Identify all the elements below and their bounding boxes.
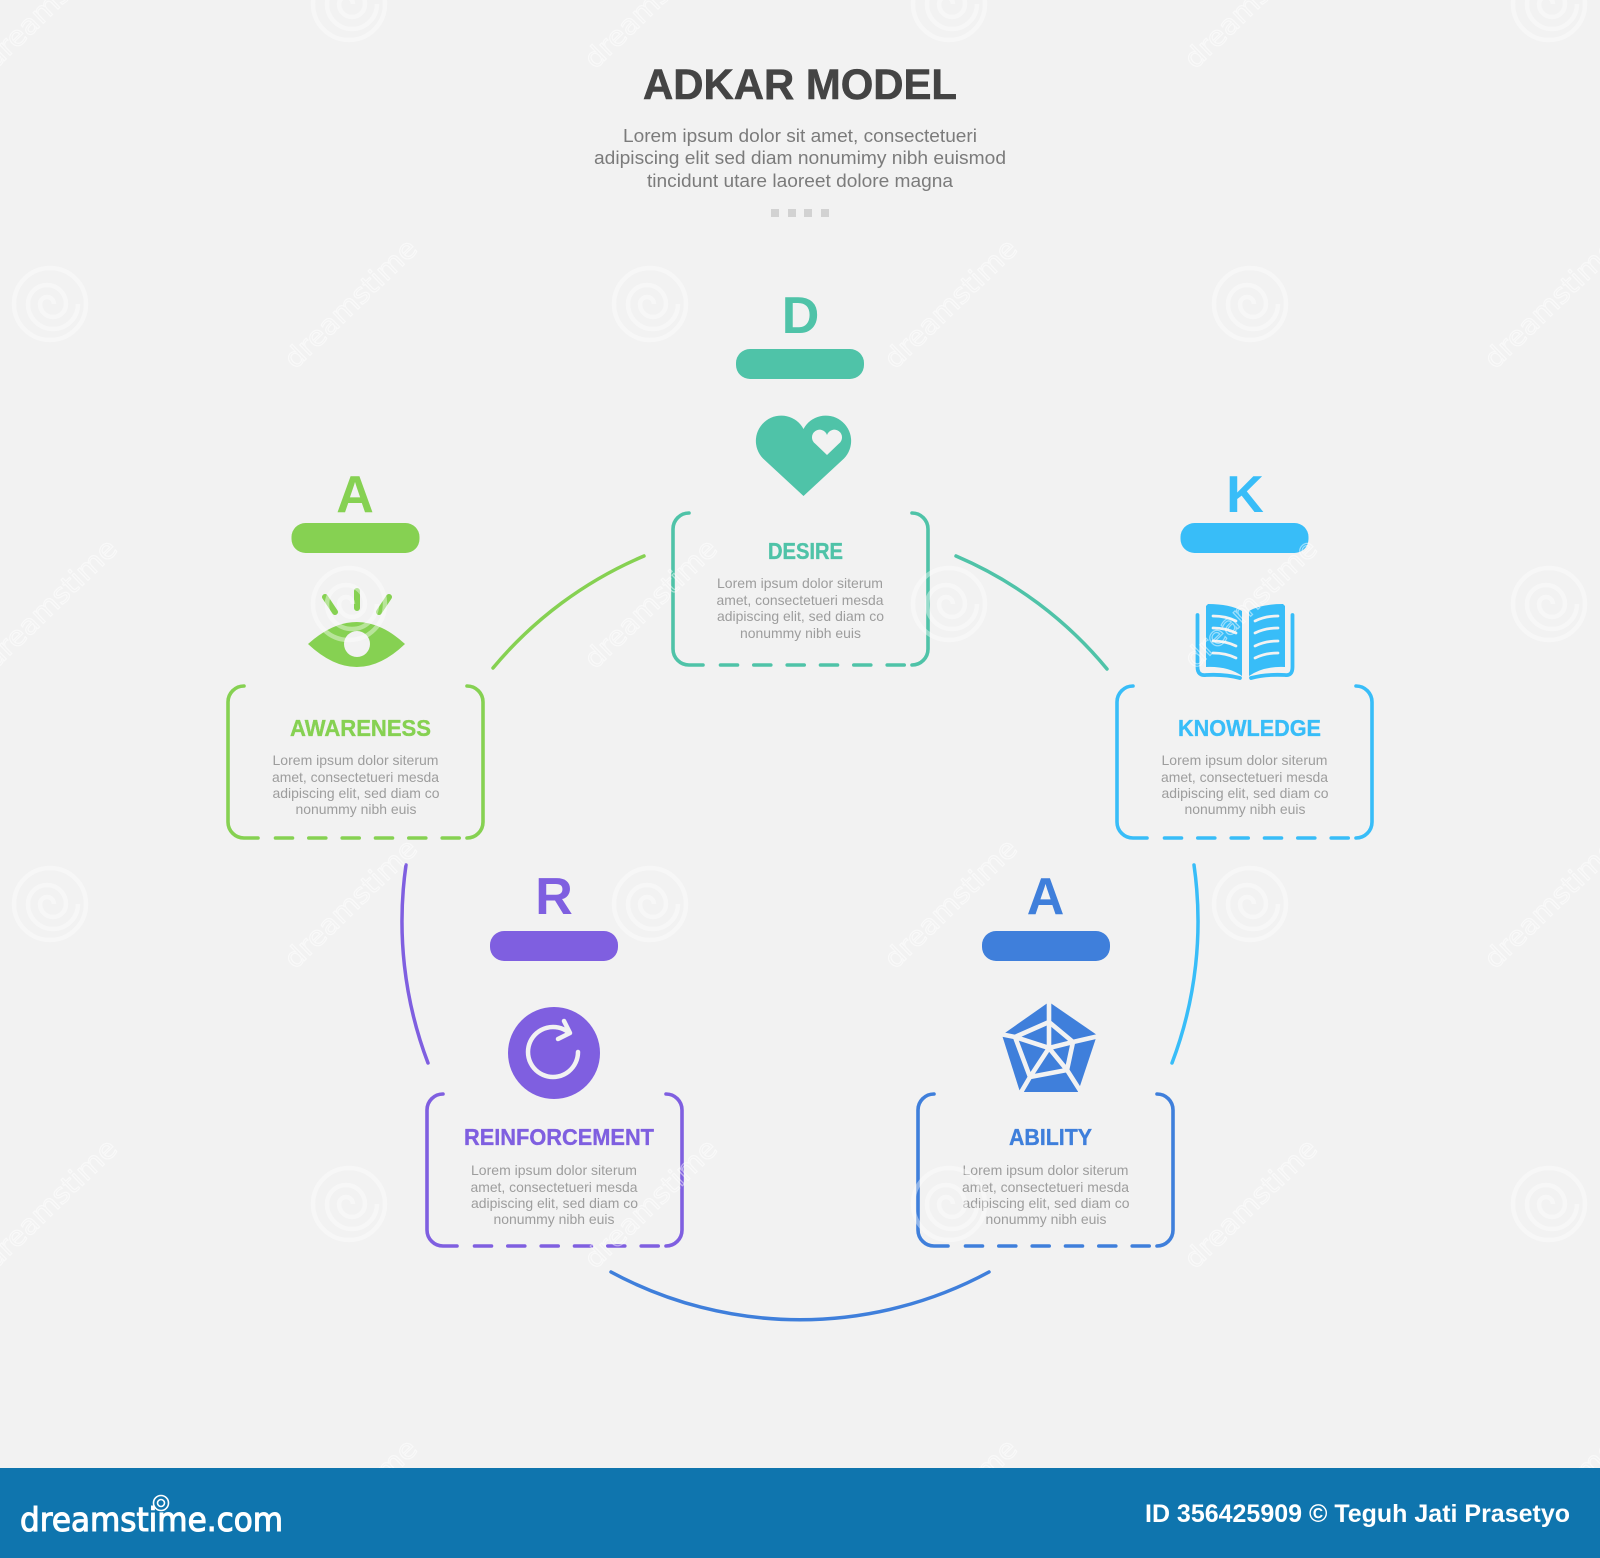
body text: amet, consectetueri mesda xyxy=(1161,769,1328,785)
bar xyxy=(736,349,864,379)
body text: nonummy nibh euis xyxy=(1184,801,1306,817)
icon: eye xyxy=(308,591,405,667)
body text: amet, consectetueri mesda xyxy=(716,592,884,608)
body text: amet, consectetueri mesda xyxy=(470,1179,638,1195)
body text xyxy=(962,1162,1130,1227)
letter R: R xyxy=(535,868,573,926)
letter A: A xyxy=(1027,868,1064,926)
heading: AWARENESS xyxy=(290,715,431,741)
cycle arcs xyxy=(402,556,1198,1320)
box xyxy=(673,513,928,665)
body text: amet, consectetueri mesda xyxy=(272,769,439,785)
panel: awareness xyxy=(228,466,483,838)
body text: Lorem ipsum dolor siterum xyxy=(717,575,883,591)
body text: adipiscing elit, sed diam co xyxy=(272,785,440,801)
bar xyxy=(490,931,618,961)
letter D: D xyxy=(782,287,819,345)
panel: desire xyxy=(673,287,928,665)
heading: DESIRE xyxy=(768,538,843,564)
icon: open book xyxy=(1198,604,1292,678)
panel: knowledge xyxy=(1117,466,1372,838)
body text: nonummy nibh euis xyxy=(740,625,861,641)
arc: desire to knowledge xyxy=(956,556,1107,669)
subtitle text: Lorem ipsum dolor sit amet, consectetueri xyxy=(623,126,977,146)
text: dreamstime xyxy=(278,833,424,975)
body text xyxy=(1161,752,1329,817)
icon: heart xyxy=(756,416,851,496)
arc: awareness to desire xyxy=(493,556,644,668)
box xyxy=(427,1094,682,1246)
logo text: dreamstime.com xyxy=(20,1500,283,1539)
text: dreamstime xyxy=(578,1133,724,1275)
subtitle text: adipiscing elit sed diam nonumimy nibh euismod xyxy=(594,148,1006,168)
heading: KNOWLEDGE xyxy=(1178,715,1321,741)
text: dreamstime xyxy=(1178,533,1324,675)
letter A: A xyxy=(336,466,374,524)
box xyxy=(1117,686,1372,838)
text: dreamstime xyxy=(1178,1133,1324,1275)
subtitle text: tincidunt utare laoreet dolore magna xyxy=(647,171,954,191)
subtitle text xyxy=(594,126,1006,191)
body text: adipiscing elit, sed diam co xyxy=(962,1195,1130,1211)
bar xyxy=(292,523,420,553)
panel: ability xyxy=(918,868,1173,1246)
text: dreamstime xyxy=(878,833,1024,975)
heading: REINFORCEMENT xyxy=(464,1124,654,1150)
body text: nonummy nibh euis xyxy=(986,1211,1106,1227)
icon: radar pentagon xyxy=(1000,1000,1099,1094)
body text: nonummy nibh euis xyxy=(494,1211,614,1227)
arc: knowledge to ability xyxy=(1172,865,1198,1063)
text: dreamstime xyxy=(578,533,724,675)
body text: adipiscing elit, sed diam co xyxy=(717,608,884,624)
body text: Lorem ipsum dolor siterum xyxy=(272,752,438,768)
arc: reinforcement to awareness xyxy=(402,865,428,1063)
image credit: ID 356425909 © Teguh Jati Prasetyo xyxy=(1145,1500,1570,1528)
panel: reinforcement xyxy=(427,868,682,1246)
title: ADKAR MODEL xyxy=(643,61,957,109)
body text xyxy=(272,752,440,817)
body text: Lorem ipsum dolor siterum xyxy=(471,1162,637,1178)
arc: ability to reinforcement xyxy=(611,1272,989,1320)
box xyxy=(918,1094,1173,1246)
bar xyxy=(982,931,1110,961)
heading: ABILITY xyxy=(1009,1124,1092,1150)
icon: logo spiral xyxy=(154,1496,168,1510)
bar xyxy=(1180,523,1308,553)
footer bar xyxy=(0,1468,1600,1558)
icon: refresh circle xyxy=(508,1007,600,1099)
body text: amet, consectetueri mesda xyxy=(962,1179,1129,1195)
body text: adipiscing elit, sed diam co xyxy=(471,1195,638,1211)
body text xyxy=(470,1162,638,1227)
body text: Lorem ipsum dolor siterum xyxy=(962,1162,1128,1178)
body text xyxy=(716,575,884,641)
body text: adipiscing elit, sed diam co xyxy=(1162,785,1329,801)
body text: nonummy nibh euis xyxy=(296,801,416,817)
body text: Lorem ipsum dolor siterum xyxy=(1162,752,1328,768)
box xyxy=(228,686,483,838)
text: dreamstime xyxy=(878,233,1024,375)
letter K: K xyxy=(1226,466,1264,524)
text: dreamstime xyxy=(278,233,424,375)
dots separator xyxy=(771,209,829,217)
